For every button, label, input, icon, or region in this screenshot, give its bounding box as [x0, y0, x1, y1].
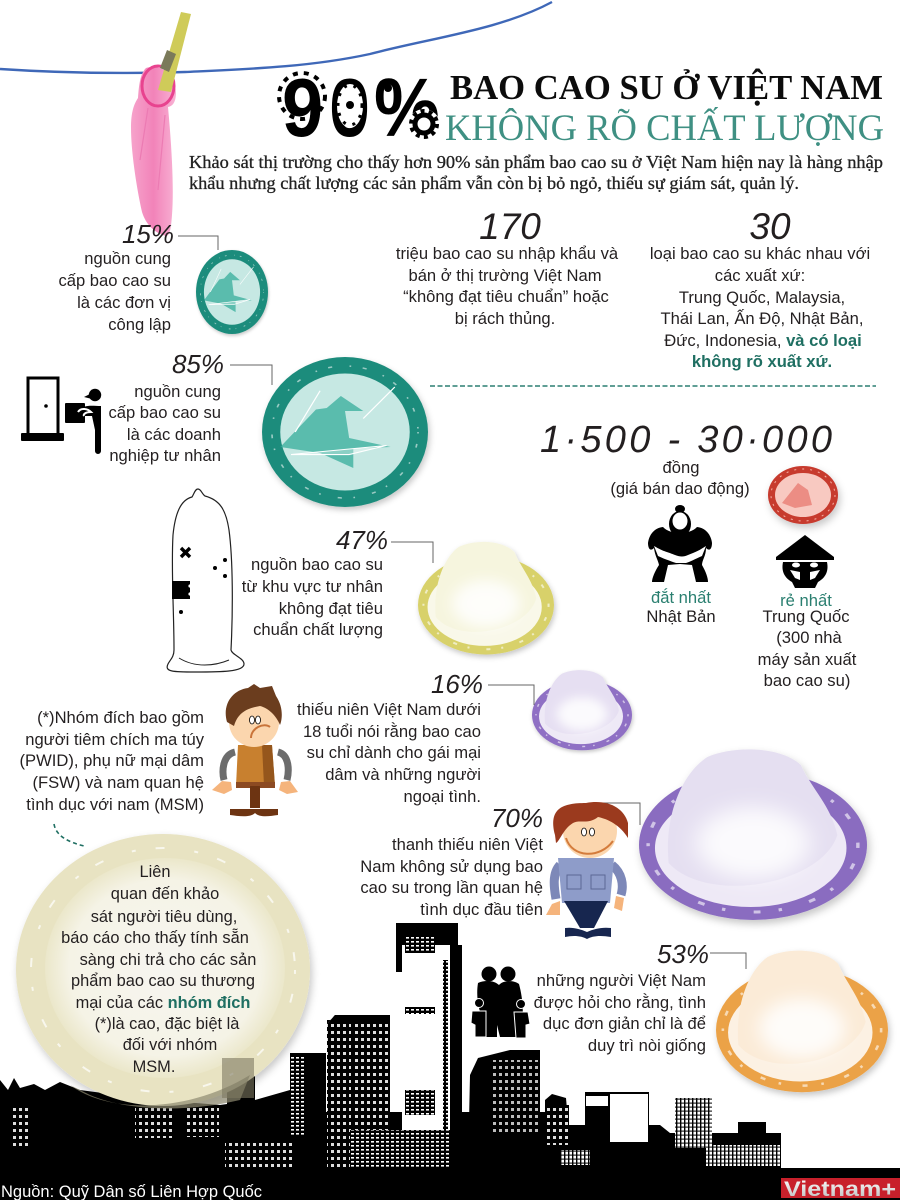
labels: cheapest and most expensive: Nhật Bản [646, 607, 716, 626]
note: target groups: (PWID), phụ nữ mại dâm [20, 751, 204, 770]
stat: 53%: duy trì nòi giống [588, 1036, 706, 1055]
stat: 53% [534, 939, 746, 1055]
stat: 170: bán ở thị trường Việt Nam [408, 266, 602, 285]
price range [540, 419, 832, 498]
icon: clothes peg [158, 12, 191, 92]
labels: cheapest and most expensive: (300 nhà [776, 628, 843, 647]
stat: 53%: được hỏi cho rằng, tình [534, 993, 706, 1012]
labels: cheapest and most expensive: Trung Quốc [762, 607, 850, 626]
labels: cheapest and most expensive: đắt nhất [651, 588, 711, 607]
stat: 170 [396, 206, 619, 328]
stat: 16% [297, 669, 534, 806]
callout text: (*)là cao, đặc biệt là [95, 1015, 240, 1033]
stat: 15%: nguồn cung [84, 249, 171, 268]
icon: sad boy cartoon [212, 684, 298, 816]
callout text [61, 863, 256, 1076]
stat: 16%: 16% [431, 669, 483, 699]
stat: 85% [108, 349, 272, 465]
note: target groups: (*)Nhóm đích bao gồm [37, 708, 204, 727]
stat: 15%: công lập [108, 315, 171, 334]
stat: 170: 170 [479, 206, 541, 247]
stat: 47%: từ khu vực tư nhân [242, 577, 383, 596]
price range: đồng [663, 458, 699, 477]
icon: pink condom hanging on line [131, 66, 176, 236]
icon: yellow condom [418, 542, 554, 654]
icon: family silhouette [471, 966, 530, 1038]
stat: 16%: dâm và những người [325, 765, 481, 784]
stat: 30: không rõ xuất xứ. [692, 352, 832, 371]
icon: condom outline with holes [167, 489, 244, 672]
stat: 170: triệu bao cao su nhập khẩu và [396, 244, 619, 263]
stat: 85%: 85% [172, 349, 224, 379]
labels: cheapest and most expensive: bao cao su) [764, 671, 850, 690]
icon: conical hat figure [776, 535, 834, 588]
note: target groups: người tiêm chích ma túy [25, 730, 205, 749]
stat: 15%: là các đơn vị [77, 293, 171, 312]
stat: 47%: nguồn bao cao su [251, 555, 383, 574]
labels: cheapest and most expensive: rẻ nhất [780, 591, 832, 610]
stat: 70%: cao su trong lần quan hệ [360, 878, 543, 897]
stat: 85%: nguồn cung [134, 382, 221, 401]
stat: 70%: tình dục đầu tiên [420, 900, 543, 919]
heading line 1: BAO CAO SU Ở VIỆT NAM [450, 67, 883, 107]
labels: cheapest and most expensive [646, 588, 857, 690]
title: 90% with gears: 90% [282, 61, 440, 154]
icon: red condom [768, 466, 838, 524]
stat: 47%: 47% [336, 525, 388, 555]
icon: door and delivery person [21, 378, 101, 454]
icon: large purple condom [639, 749, 867, 920]
intro text: khẩu nhưng chất lượng các sản phẩm vẫn còn bị bỏ ngỏ, thiếu sự giám sát, quản lý. [189, 173, 799, 193]
stat: 47%: chuẩn chất lượng [253, 620, 383, 639]
stat: 170: “không đạt tiêu chuẩn” hoặc [403, 287, 609, 306]
stat: 70%: Nam không sử dụng bao [360, 857, 543, 876]
price range: (giá bán dao động) [610, 479, 750, 498]
icon: sumo wrestler [648, 505, 712, 582]
callout text: sàng chi trả cho các sản [80, 951, 256, 969]
stat: 70%: 70% [491, 803, 543, 833]
stat: 30: 30 [749, 206, 791, 247]
stat: 85%: là các doanh [127, 425, 221, 444]
stat: 30: Thái Lan, Ấn Độ, Nhật Bản, [661, 309, 863, 328]
stat: 16%: su chỉ dành cho gái mại [307, 743, 481, 762]
stat: 85%: nghiệp tư nhân [109, 446, 221, 465]
note: target groups: (FSW) và nam quan hệ [32, 773, 204, 792]
callout text: mại của các nhóm đích [76, 994, 250, 1012]
callout text: quan đến khảo [111, 885, 219, 903]
stat: 170: bị rách thủng. [455, 309, 555, 328]
panel: cream condom callout [16, 834, 310, 1108]
note: target groups [20, 708, 205, 846]
icon: orange condom [716, 951, 888, 1092]
callout text: đối với nhóm [123, 1036, 217, 1054]
clothesline [0, 2, 552, 73]
icon: large teal condom [262, 357, 428, 507]
stat: 15%: 15% [122, 219, 174, 249]
stat: 15% [58, 219, 218, 334]
stat: 70%: thanh thiếu niên Việt [392, 835, 543, 854]
city skyline [0, 923, 900, 1200]
stat: 53%: 53% [657, 939, 709, 969]
stat: 16%: 18 tuổi nói rằng bao cao [303, 722, 481, 741]
callout text: phẩm bao cao su thương [71, 972, 255, 990]
stat: 30: các xuất xứ: [715, 266, 805, 285]
stat: 53%: dục đơn giản chỉ là để [543, 1014, 706, 1033]
stat: 16%: ngoại tình. [404, 787, 481, 806]
stat: 30 [650, 206, 870, 371]
icon: small teal condom [196, 250, 268, 334]
stat: 16%: thiếu niên Việt Nam dưới [297, 700, 481, 719]
stat: 30: Trung Quốc, Malaysia, [679, 288, 845, 307]
labels: cheapest and most expensive: máy sản xuất [758, 650, 857, 669]
stat: 85%: cấp bao cao su [108, 403, 221, 422]
stat: 70% [360, 803, 543, 919]
note: target groups: tình dục với nam (MSM) [26, 795, 204, 814]
icon: smiling boy cartoon [546, 802, 628, 939]
callout text: MSM. [133, 1058, 175, 1076]
stat: 47% [242, 525, 433, 639]
stat: 30: Đức, Indonesia, và có loại [664, 331, 862, 350]
callout text: Liên [140, 863, 170, 881]
icon: small purple condom [532, 670, 632, 750]
intro text: Khảo sát thị trường cho thấy hơn 90% sản phẩm bao cao su ở Việt Nam hiện nay là hàng nhập [189, 152, 883, 172]
stat: 53%: những người Việt Nam [537, 971, 706, 990]
price range: 1·500 - 30·000 [540, 419, 832, 461]
stat: 15%: cấp bao cao su [58, 271, 171, 290]
callout text: báo cáo cho thấy tính sẵn [61, 928, 249, 947]
intro text [189, 152, 883, 193]
heading line 2: KHÔNG RÕ CHẤT LƯỢNG [445, 106, 884, 149]
stat: 47%: không đạt tiêu [279, 599, 383, 618]
stat: 30: loại bao cao su khác nhau với [650, 244, 870, 263]
callout text: sát người tiêu dùng, [91, 908, 237, 926]
